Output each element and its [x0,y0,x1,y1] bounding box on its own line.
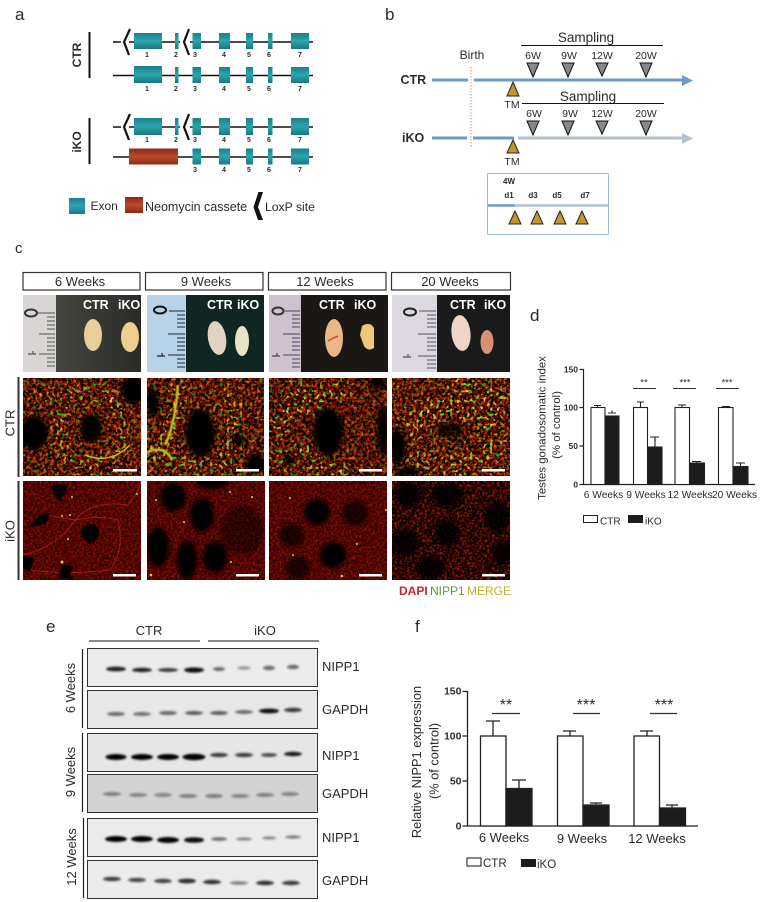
age labels [63,649,84,898]
age labels: 9 Weeks [63,746,78,797]
CTR sampling points [521,30,663,77]
blot protein labels: NIPP1 [322,830,360,845]
x labels [479,830,686,846]
row label CTR [2,377,20,477]
legend [467,858,556,871]
CTR wild-type allele: 6 [267,86,271,93]
significance markers: ** [640,378,648,388]
blot: 12 weeks NIPP1 [88,818,318,856]
iKO tamoxifen marker: TM [504,156,520,168]
legend: CTR [600,516,621,528]
CTR wild-type allele: 4 [222,86,226,93]
iKO recombined allele with neomycin cassette [113,148,313,174]
tamoxifen schedule inset: d5 [552,191,562,200]
blot protein labels: GAPDH [322,873,368,888]
tamoxifen schedule inset: d3 [528,191,538,200]
panel c: testes photos and immunofluorescence [2,240,512,598]
iKO floxed allele: 4 [222,137,226,144]
CTR wild-type allele: 2 [174,86,178,93]
legend for gene schematic: Neomycin cassete [145,200,247,214]
bars with error bars [591,402,748,484]
blot: 6 weeks NIPP1 [88,648,318,686]
CTR wild-type allele: 1 [145,86,149,93]
x labels: 9 Weeks [557,831,608,846]
blot protein labels: NIPP1 [322,748,360,763]
significance markers [492,697,677,714]
photo: 12 weeks testes [269,295,388,372]
blot: 12 weeks GAPDH [88,860,318,898]
photo: 20 weeks testes: CTR [450,298,476,312]
iKO sampling points: Sampling [560,89,616,104]
axis title [536,356,563,500]
significance markers: *** [679,378,691,388]
axes and tick labels: 0 [573,480,578,490]
blot protein labels: GAPDH [322,786,368,801]
age labels: 12 Weeks [64,828,79,886]
iKO timeline [402,131,693,145]
iKO recombined allele with neomycin cassette: 4 [222,167,226,174]
photo: 12 weeks testes: CTR [319,298,345,312]
significance markers: *** [655,697,673,714]
genotype header: CTR [136,623,162,638]
stain legend [399,584,511,598]
legend for gene schematic: Exon [90,199,118,213]
iKO floxed allele [113,114,313,144]
photo: 12 weeks testes: iKO [354,298,376,312]
age labels: 6 Weeks [63,662,78,713]
row label iKO: iKO [2,520,18,542]
blot: 9 weeks NIPP1 [88,734,318,772]
x labels: 9 Weeks [626,490,666,501]
CTR floxed allele: 3 [193,52,197,59]
axes and tick labels [564,364,755,490]
axes and tick labels: 50 [450,776,462,788]
iKO sampling points: 20W [635,108,657,120]
micrograph: CTR 20 weeks [390,378,510,477]
photo: 20 weeks testes: iKO [484,298,506,312]
CTR timeline [400,73,693,87]
birth marker [460,48,484,147]
age headers: 20 Weeks [421,274,479,289]
iKO recombined allele with neomycin cassette: 5 [247,167,251,174]
CTR sampling points: 12W [591,50,613,62]
axes and tick labels: 100 [564,402,578,412]
CTR floxed allele: 4 [222,52,226,59]
tamoxifen schedule inset: d1 [504,191,514,200]
blot protein labels [322,659,368,888]
age headers: 12 Weeks [296,274,354,289]
photo: 9 weeks testes: iKO [237,298,260,312]
tamoxifen schedule inset: 4W [503,177,515,186]
legend [584,515,662,528]
iKO floxed allele: 3 [193,137,197,144]
tamoxifen schedule inset: d7 [580,191,590,200]
row label CTR: CTR [2,410,18,436]
axes and tick labels [444,686,698,832]
x labels: 6 Weeks [479,830,530,845]
blot protein labels: NIPP1 [322,659,360,674]
bars with error bars [480,721,686,826]
panel letter b: b [385,5,394,24]
iKO tamoxifen marker [504,140,520,168]
CTR group label [70,32,90,78]
CTR floxed allele: 6 [267,52,271,59]
micrograph: CTR 9 weeks [147,378,266,476]
panel letter e: e [46,617,55,636]
CTR sampling points: 9W [561,50,577,62]
x labels [584,490,757,501]
photo: 20 weeks testes [392,295,510,372]
legend for gene schematic: LoxP site [265,200,315,214]
iKO sampling points: 12W [591,108,613,120]
stain legend: NIPP1 [430,584,465,598]
axis title: (% of control) [551,391,563,459]
stain legend: DAPI [399,584,428,598]
significance markers: *** [721,378,733,388]
iKO timeline: iKO [402,131,424,145]
genotype header [89,623,319,641]
age headers: 9 Weeks [181,274,232,289]
iKO group label: iKO [70,131,84,153]
axes and tick labels: 100 [444,730,462,742]
panel e: western blots [46,617,368,898]
micrograph: iKO 20 weeks [391,481,512,580]
photo: 9 weeks testes [147,295,264,372]
stain legend: MERGE [467,584,511,598]
iKO floxed allele: 7 [298,137,302,144]
CTR sampling points: 6W [525,50,541,62]
iKO recombined allele with neomycin cassette: 3 [193,167,197,174]
micrograph: iKO 12 weeks [269,481,387,580]
panel letter c: c [15,240,23,257]
axes and tick labels: 0 [456,820,462,832]
photo: 6 weeks testes [23,295,141,372]
iKO floxed allele: 2 [174,137,178,144]
axis title [409,686,442,838]
iKO sampling points: 6W [526,108,542,120]
legend: iKO [645,516,662,528]
x labels: 20 Weeks [712,490,757,501]
iKO floxed allele: 5 [247,137,251,144]
micrograph: iKO 6 weeks [23,480,141,580]
photo: 6 weeks testes: iKO [118,298,140,312]
CTR group label: CTR [70,42,84,67]
axis title: Relative NIPP1 expression [409,686,424,838]
age headers [23,272,510,290]
iKO sampling points: 9W [562,108,578,120]
CTR wild-type allele: 7 [298,86,302,93]
axis title: Testes gonadosomatic index [536,356,548,500]
panel f: relative NIPP1 expression chart [409,617,698,871]
axis title: (% of control) [426,723,442,799]
blot: 9 weeks GAPDH [88,774,318,812]
iKO floxed allele: 6 [267,137,271,144]
CTR floxed allele: 2 [174,52,178,59]
CTR wild-type allele [113,66,313,93]
iKO recombined allele with neomycin cassette: 7 [298,167,302,174]
CTR sampling points: Sampling [558,30,614,45]
iKO group label [70,118,90,164]
age headers: 6 Weeks [55,274,106,289]
row label iKO [2,481,20,580]
CTR floxed allele: 1 [145,52,149,59]
panel d: testes gonadosomatic index chart [530,306,757,528]
CTR tamoxifen marker [504,82,520,111]
legend for gene schematic [69,192,315,220]
blot: 6 weeks GAPDH [88,690,318,728]
x labels: 6 Weeks [584,490,623,501]
panel letter d: d [530,306,539,325]
CTR wild-type allele: 5 [247,86,251,93]
micrograph: CTR 6 weeks [20,376,145,476]
axes and tick labels: 150 [564,364,578,374]
panel a: gene targeting schematic [15,5,315,220]
x labels: 12 Weeks [628,831,686,846]
photo: 9 weeks testes: CTR [207,298,233,312]
CTR tamoxifen marker: TM [504,99,520,111]
genotype header: iKO [254,623,276,638]
significance markers [633,378,739,388]
axes and tick labels: 50 [569,441,578,451]
CTR sampling points: 20W [635,50,657,62]
micrograph: CTR 12 weeks [269,376,389,476]
iKO recombined allele with neomycin cassette: 6 [267,167,271,174]
CTR wild-type allele: 3 [193,86,197,93]
CTR timeline: CTR [400,73,426,87]
significance markers: ** [500,697,512,714]
CTR floxed allele [113,29,313,59]
CTR floxed allele: 7 [298,52,302,59]
micrograph: iKO 9 weeks [147,475,265,580]
iKO floxed allele: 1 [145,137,149,144]
x labels: 12 Weeks [667,490,713,501]
panel letter a: a [15,5,25,24]
legend: iKO [537,859,556,871]
iKO sampling points [522,89,664,135]
axes and tick labels: 150 [444,686,462,698]
photo: 6 weeks testes: CTR [83,298,109,312]
legend: CTR [483,858,507,870]
panel b: experimental timeline [385,5,693,234]
panel letter f: f [415,617,420,636]
CTR floxed allele: 5 [247,52,251,59]
tamoxifen schedule inset [488,174,608,234]
blot protein labels: GAPDH [322,702,368,717]
significance markers: *** [577,697,595,714]
birth marker: Birth [460,48,484,62]
